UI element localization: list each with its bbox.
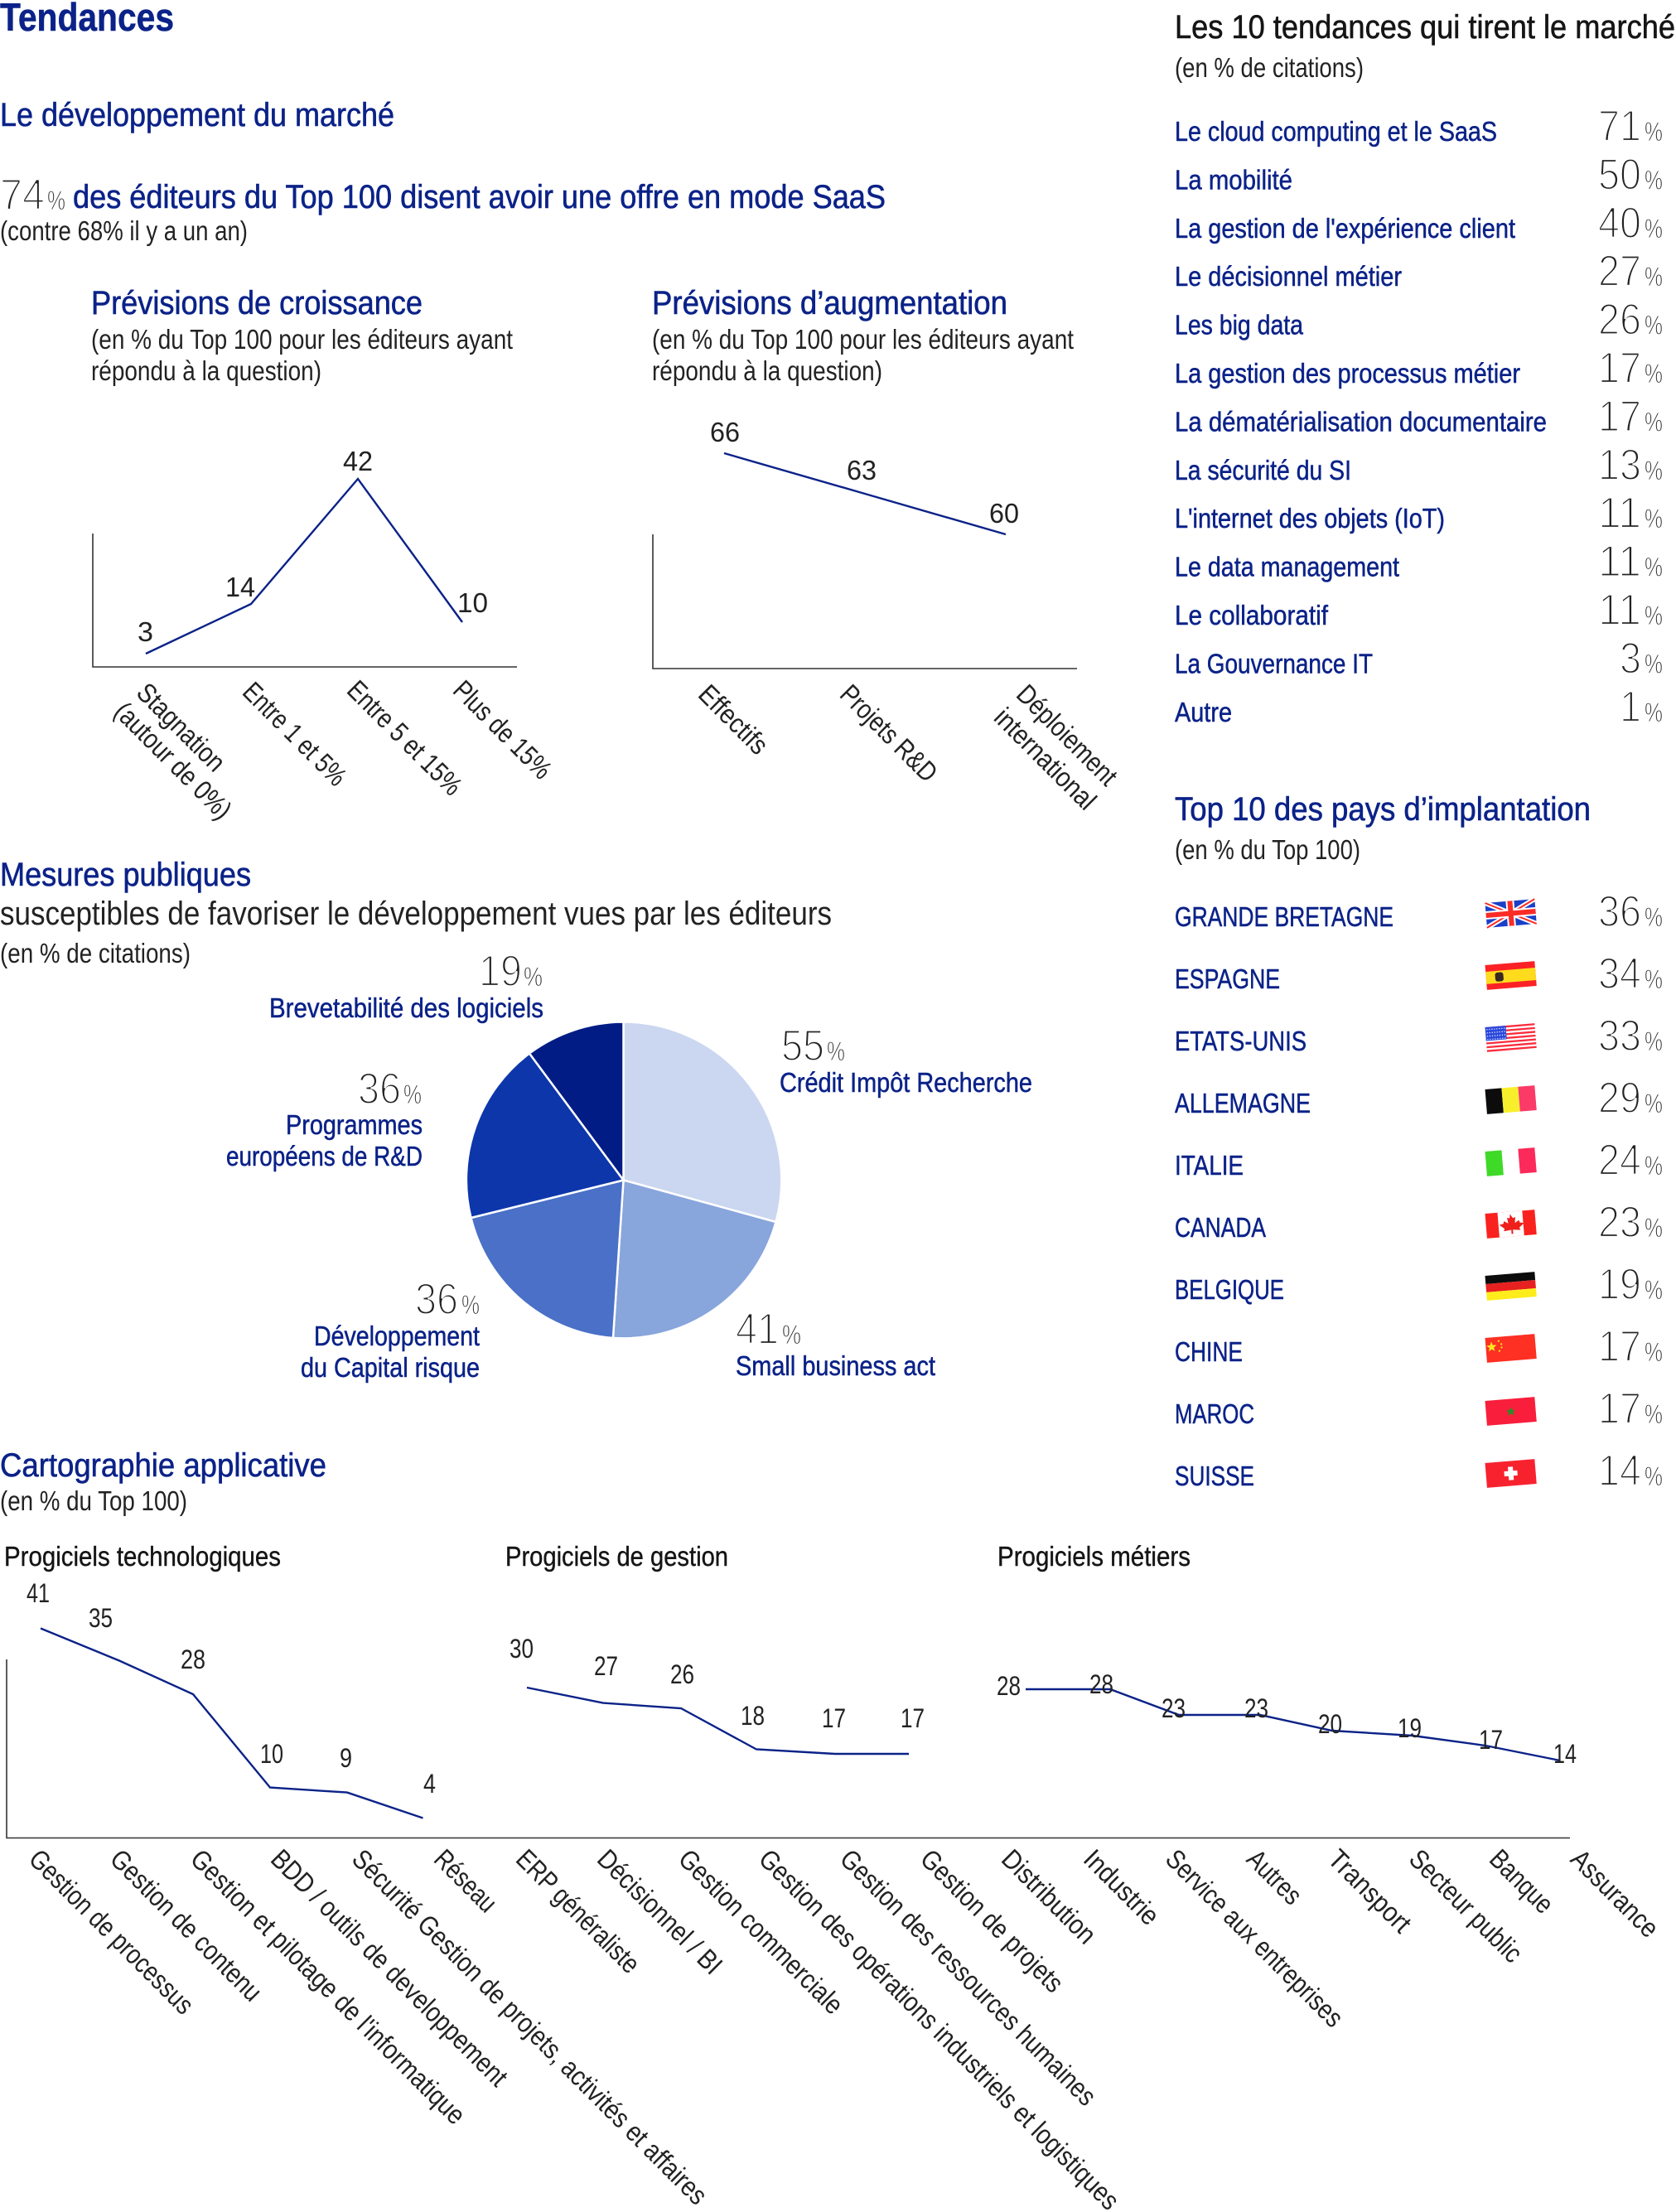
panel: Prévisions de croissance: 14 — [225, 572, 255, 602]
panel: Top 10 des pays: ALLEMAGNE — [1175, 1088, 1311, 1118]
rotated axis labels: BDD / outils de developpement — [265, 1843, 514, 2092]
line chart: Progiciels technologiques: 10 — [260, 1739, 283, 1769]
panel: Les 10 tendances: % — [1645, 214, 1663, 244]
line chart: Progiciels de gestion: 18 — [741, 1701, 765, 1731]
rotated axis labels: Transport — [1322, 1843, 1418, 1939]
panel: Les 10 tendances: 11 — [1598, 538, 1641, 587]
panel: Top 10 des pays: BELGIQUE — [1175, 1274, 1284, 1305]
panel: Prévisions d'augmentation: répondu à la question) — [652, 355, 882, 386]
panel: Mesures publiques: (en % de citations) — [0, 938, 191, 968]
panel: Les 10 tendances: 50 — [1598, 150, 1641, 199]
line chart: Progiciels technologiques: 41 — [27, 1578, 50, 1608]
rotated axis labels: Autres — [1241, 1843, 1308, 1910]
panel: Top 10 des pays: 33 — [1598, 1012, 1641, 1060]
panel: Mesures publiques: susceptibles de favoriser le développement vues par les éditeurs — [0, 896, 832, 932]
panel: Top 10 des pays: 17 — [1598, 1322, 1641, 1371]
panel: Mesures publiques: % — [827, 1036, 845, 1066]
rotated axis labels: Assurance — [1565, 1843, 1665, 1944]
panel: Les 10 tendances: 40 — [1598, 199, 1641, 248]
rotated axis labels: Décisionnel / BI — [592, 1843, 729, 1980]
rotated axis labels: Réseau — [428, 1843, 504, 1918]
panel: Les 10 tendances: % — [1645, 117, 1663, 147]
panel: Les 10 tendances: Autre — [1175, 697, 1232, 727]
line chart: Progiciels métiers: 23 — [1162, 1693, 1186, 1723]
rotated axis labels: Gestion commerciale — [673, 1843, 850, 2020]
stat: 74% SaaS: % — [47, 186, 65, 215]
panel: Mesures publiques: 55 — [781, 1021, 824, 1070]
panel: Top 10 des pays: CANADA — [1175, 1212, 1266, 1243]
icon: flag Suisse — [1485, 1459, 1537, 1488]
stat: 74% SaaS: (contre 68% il y a un an) — [0, 215, 248, 246]
panel: Top 10 des pays: 36 — [1598, 887, 1641, 936]
panel: Cartographie applicative — [0, 1447, 1665, 2212]
panel: Mesures publiques: % — [403, 1079, 422, 1109]
panel: Les 10 tendances: Les big data — [1175, 310, 1304, 340]
panel: Top 10 des pays: 29 — [1598, 1074, 1641, 1123]
pie chart — [466, 1022, 781, 1338]
panel: Cartographie applicative: (en % du Top 100) — [0, 1485, 187, 1516]
line chart: Progiciels technologiques: 9 — [340, 1743, 352, 1773]
line chart: Progiciels de gestion: 30 — [510, 1634, 534, 1664]
stat: 74% SaaS: des éditeurs du Top 100 disent avoir une offre en mode SaaS — [73, 179, 886, 215]
line chart: Progiciels technologiques: 28 — [181, 1645, 205, 1674]
panel: Top 10 des pays: % — [1645, 1399, 1663, 1429]
line chart: Progiciels métiers: 28 — [997, 1671, 1021, 1701]
line chart: Progiciels métiers: 20 — [1318, 1709, 1342, 1739]
panel: Prévisions d'augmentation: Projets R&D — [834, 679, 944, 788]
panel: Prévisions de croissance — [91, 285, 558, 825]
panel: Les 10 tendances: 17 — [1598, 344, 1641, 393]
panel: Top 10 des pays: % — [1645, 1337, 1663, 1367]
panel: Mesures publiques: Crédit Impôt Recherche — [780, 1067, 1032, 1098]
panel: Mesures publiques: Small business act — [736, 1350, 935, 1381]
panel: Prévisions de croissance: Plus de 15% — [447, 674, 558, 785]
panel: Prévisions d'augmentation: 63 — [847, 455, 877, 485]
icon: flag Chine — [1485, 1334, 1537, 1363]
panel: Les 10 tendances: La mobilité — [1175, 164, 1292, 195]
panel: Mesures publiques: % — [524, 962, 543, 992]
line chart: Progiciels de gestion: 26 — [670, 1659, 694, 1689]
panel: Top 10 des pays: % — [1645, 1461, 1663, 1491]
panel: Les 10 tendances: 13 — [1598, 441, 1641, 490]
panel: Les 10 tendances: % — [1645, 504, 1663, 534]
panel: Top 10 des pays: 34 — [1598, 949, 1641, 998]
panel: Prévisions de croissance: répondu à la question) — [91, 355, 321, 386]
panel: Les 10 tendances: % — [1645, 311, 1663, 340]
rotated axis labels: Gestion de projets — [915, 1843, 1070, 1998]
panel: Top 10 des pays: ETATS-UNIS — [1175, 1026, 1307, 1056]
line chart: Progiciels de gestion — [510, 1634, 925, 1754]
panel: Top 10 des pays: % — [1645, 1026, 1663, 1056]
panel: Prévisions d'augmentation: (en % du Top 100 pour les éditeurs ayant — [652, 324, 1074, 355]
panel: Prévisions de croissance: Prévisions de croissance — [91, 285, 423, 321]
panel: Mesures publiques: Développement — [314, 1321, 480, 1351]
line chart: Progiciels métiers: 23 — [1244, 1693, 1268, 1723]
rotated axis labels: Service aux entreprises — [1160, 1843, 1350, 2033]
panel: Les 10 tendances: % — [1645, 456, 1663, 485]
panel: Les 10 tendances: 11 — [1598, 586, 1641, 635]
panel: Prévisions d'augmentation: international — [988, 702, 1103, 816]
panel: Les 10 tendances: % — [1645, 649, 1663, 679]
panel: Les 10 tendances: La gestion des processus métier — [1175, 358, 1520, 389]
panel: Top 10 des pays: 14 — [1598, 1446, 1641, 1495]
line chart: Progiciels de gestion: 17 — [822, 1703, 846, 1733]
panel: Top 10 des pays: % — [1645, 902, 1663, 932]
panel: Les 10 tendances: La gestion de l'expérience client — [1175, 213, 1515, 244]
panel: Mesures publiques: européens de R&D — [226, 1141, 423, 1171]
panel: Prévisions de croissance: (autour de 0%) — [109, 696, 238, 825]
panel: Top 10 des pays: 19 — [1598, 1260, 1641, 1309]
panel: Les 10 tendances: % — [1645, 262, 1663, 292]
panel: Prévisions d'augmentation: Effectifs — [693, 679, 775, 761]
chart axes — [7, 1659, 1570, 1838]
panel: Top 10 des pays: % — [1645, 1213, 1663, 1243]
rotated axis labels: Gestion de processus — [23, 1843, 200, 2020]
panel: Prévisions d'augmentation: Prévisions d’augmentation — [652, 285, 1007, 321]
panel: Les 10 tendances: % — [1645, 601, 1663, 630]
panel: Prévisions d'augmentation: 60 — [989, 498, 1019, 529]
line chart: Progiciels de gestion: 17 — [901, 1703, 925, 1733]
line chart: Progiciels technologiques — [27, 1578, 436, 1818]
line chart: Progiciels technologiques: 35 — [89, 1603, 113, 1633]
panel: Mesures publiques: % — [782, 1320, 801, 1350]
panel: Les 10 tendances: 26 — [1598, 296, 1641, 345]
panel: Top 10 des pays: % — [1645, 1151, 1663, 1181]
rotated axis labels: Banque — [1484, 1843, 1560, 1920]
panel: Mesures publiques: 41 — [736, 1305, 779, 1354]
panel: Top 10 des pays: 23 — [1598, 1198, 1641, 1247]
panel: Top 10 des pays: % — [1645, 1275, 1663, 1305]
panel: Les 10 tendances: L'internet des objets (IoT) — [1175, 503, 1445, 534]
panel: Top 10 des pays: (en % du Top 100) — [1175, 834, 1360, 865]
panel: Top 10 des pays: % — [1645, 1089, 1663, 1118]
rotated axis labels: Distribution — [996, 1843, 1103, 1949]
panel: Les 10 tendances: 1 — [1620, 683, 1641, 732]
panel: Top 10 des pays — [1175, 791, 1663, 1495]
panel: Prévisions d'augmentation: Déploiement — [1011, 679, 1124, 791]
panel: Prévisions d'augmentation: 66 — [710, 417, 740, 447]
panel: Les 10 tendances: 17 — [1598, 392, 1641, 441]
panel: Cartographie applicative: Cartographie applicative — [0, 1447, 326, 1484]
panel: Top 10 des pays: Top 10 des pays d’implantation — [1175, 791, 1591, 828]
panel: Prévisions de croissance: 42 — [343, 446, 373, 476]
line chart: Progiciels métiers: 17 — [1479, 1725, 1503, 1755]
panel: Top 10 des pays: 24 — [1598, 1136, 1641, 1185]
icon: flag Belgique — [1485, 1085, 1537, 1114]
panel: Top 10 des pays: MAROC — [1175, 1398, 1254, 1429]
panel: Les 10 tendances: % — [1645, 698, 1663, 727]
panel: Les 10 tendances: % — [1645, 553, 1663, 582]
panel: Cartographie applicative: Progiciels métiers — [997, 1541, 1191, 1572]
line chart: Progiciels métiers — [997, 1669, 1577, 1769]
panel: Top 10 des pays: ITALIE — [1175, 1150, 1244, 1181]
icon: flag Etats-Unis — [1485, 1023, 1537, 1052]
icon: flag Italie — [1485, 1147, 1537, 1176]
panel: Mesures publiques: 19 — [479, 947, 522, 996]
panel: Les 10 tendances: 71 — [1598, 102, 1641, 151]
panel: Les 10 tendances: La Gouvernance IT — [1175, 648, 1373, 679]
panel: Prévisions de croissance: Entre 5 et 15% — [341, 674, 468, 801]
panel: Les 10 tendances: 11 — [1598, 489, 1641, 538]
icon: flag Allemagne — [1485, 1272, 1537, 1301]
panel: Top 10 des pays: SUISSE — [1175, 1461, 1254, 1491]
panel: Les 10 tendances: Le décisionnel métier — [1175, 261, 1402, 292]
panel: Mesures publiques: 36 — [358, 1065, 401, 1113]
panel: Mesures publiques: du Capital risque — [301, 1352, 480, 1383]
panel: Prévisions de croissance: (en % du Top 100 pour les éditeurs ayant — [91, 324, 513, 355]
panel: Top 10 des pays: CHINE — [1175, 1336, 1243, 1367]
rotated axis labels: Gestion de contenu — [104, 1843, 268, 2007]
icon: flag Canada — [1485, 1210, 1537, 1239]
panel: Mesures publiques: 36 — [415, 1275, 458, 1324]
heading: Le développement du marché: Le développement du marché — [0, 97, 394, 133]
panel: Mesures publiques: Mesures publiques — [0, 857, 251, 893]
rotated axis labels: ERP généraliste — [510, 1843, 646, 1979]
panel: Top 10 des pays: % — [1645, 964, 1663, 994]
panel: Les 10 tendances: 3 — [1620, 634, 1641, 683]
rotated axis labels: Secteur public — [1403, 1843, 1529, 1968]
rotated axis labels: Industrie — [1078, 1843, 1166, 1931]
panel: Les 10 tendances: La dématérialisation documentaire — [1175, 406, 1547, 437]
panel: Les 10 tendances: 27 — [1598, 247, 1641, 296]
icon: flag Espagne — [1485, 961, 1537, 990]
line chart: Progiciels métiers: 28 — [1089, 1669, 1113, 1699]
panel: Mesures publiques: % — [461, 1290, 480, 1320]
rotated axis labels: Gestion et pilotage de l'informatique — [185, 1843, 472, 2130]
panel: Mesures publiques — [0, 857, 1032, 1383]
icon: flag Maroc — [1485, 1397, 1537, 1426]
icon: flag Royaume-Uni — [1485, 899, 1537, 928]
panel: Les 10 tendances: % — [1645, 359, 1663, 389]
stat: 74% SaaS — [0, 171, 886, 246]
panel: Cartographie applicative: Progiciels de gestion — [505, 1541, 728, 1572]
panel: Les 10 tendances: % — [1645, 165, 1663, 195]
stat: 74% SaaS: 74 — [0, 171, 45, 220]
panel: Mesures publiques: Brevetabilité des logiciels — [269, 993, 543, 1023]
panel: Prévisions de croissance: Entre 1 et 5% — [237, 676, 353, 792]
panel: Les 10 tendances: Le collaboratif — [1175, 600, 1329, 630]
panel: Top 10 des pays: GRANDE BRETAGNE — [1175, 901, 1393, 932]
panel: Les 10 tendances — [1175, 9, 1675, 732]
panel: Cartographie applicative: Progiciels technologiques — [4, 1541, 281, 1572]
line chart: Progiciels technologiques: 4 — [423, 1769, 436, 1799]
panel: Prévisions de croissance: 10 — [457, 587, 488, 618]
panel: Prévisions de croissance: 3 — [138, 616, 153, 647]
panel: Les 10 tendances: (en % de citations) — [1175, 52, 1364, 83]
panel: Top 10 des pays: ESPAGNE — [1175, 964, 1280, 994]
panel: Les 10 tendances: Le cloud computing et le SaaS — [1175, 116, 1497, 147]
panel: Mesures publiques: Programmes — [286, 1109, 423, 1140]
panel: Prévisions de croissance: Stagnation — [131, 677, 232, 777]
line chart: Progiciels de gestion: 27 — [594, 1651, 618, 1681]
line chart: Progiciels métiers: 19 — [1398, 1713, 1422, 1743]
panel: Les 10 tendances: % — [1645, 407, 1663, 437]
panel: Les 10 tendances: Le data management — [1175, 552, 1399, 582]
panel: Top 10 des pays: 17 — [1598, 1384, 1641, 1433]
panel: Prévisions d'augmentation — [652, 285, 1124, 816]
rotated axis labels: Gestion des ressources humaines — [834, 1843, 1103, 2112]
panel: Les 10 tendances: La sécurité du SI — [1175, 455, 1351, 485]
rotated axis labels — [23, 1843, 1665, 2212]
line chart: Progiciels métiers: 14 — [1553, 1739, 1577, 1769]
